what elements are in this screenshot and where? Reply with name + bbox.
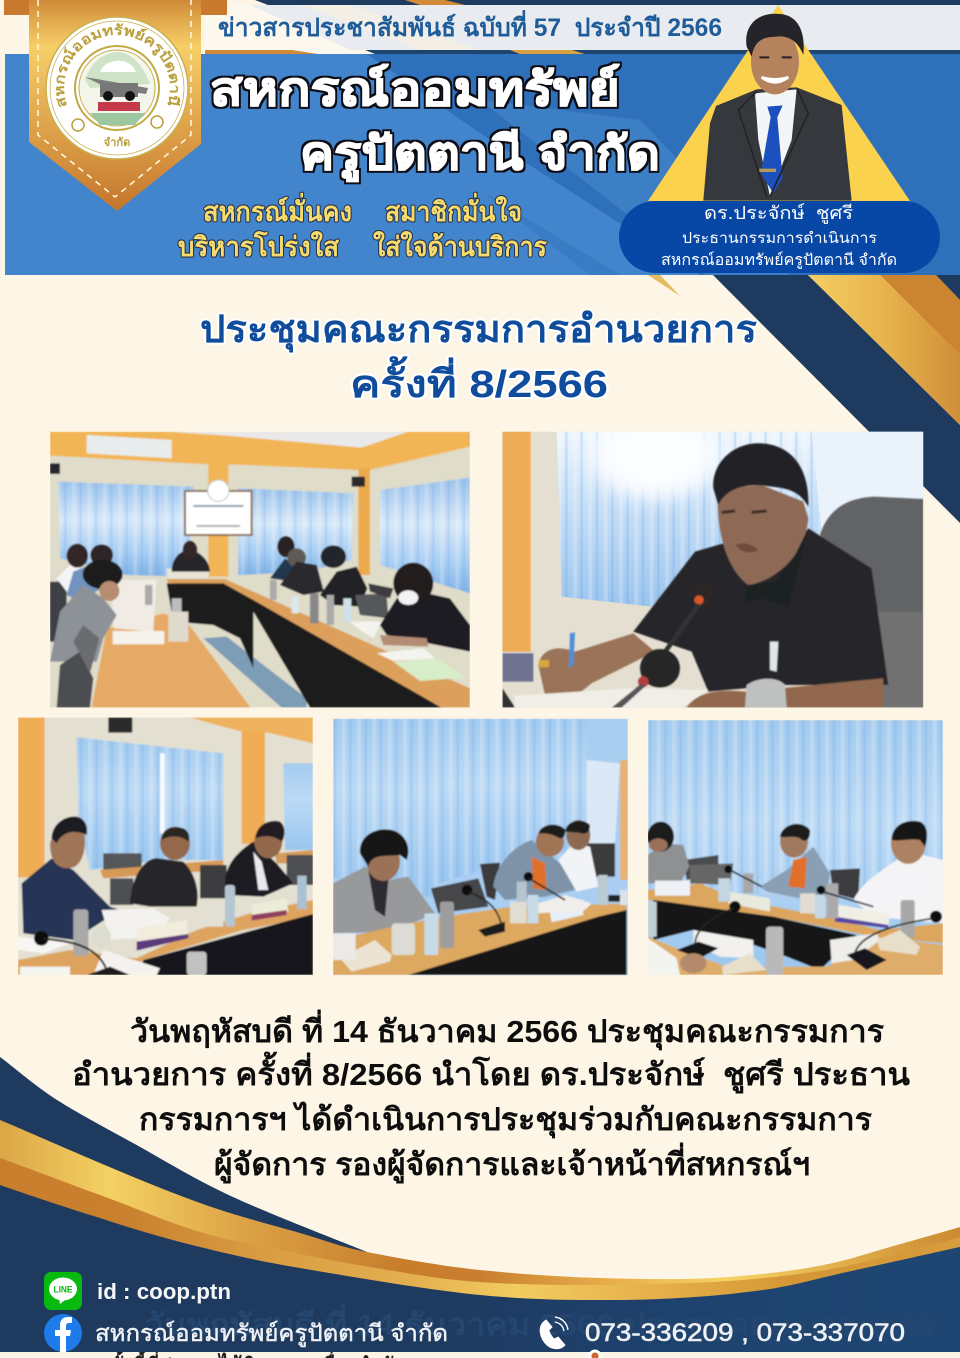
- title: ครั้งที่ 8/2566: [350, 356, 608, 406]
- motto text: ใส่ใจด้านบริการ: [373, 231, 547, 262]
- ribbon with logo: [4, 0, 227, 211]
- LINE id: id : coop.ptn: [97, 1279, 231, 1304]
- icon: LINE: LINE: [54, 1284, 72, 1294]
- newsletter issue line: ข่าวสารประชาสัมพันธ์ ฉบับที่ 57 ประจำปี 2566: [218, 10, 722, 42]
- icon: telephone: [541, 1317, 568, 1348]
- body paragraph: [72, 1009, 910, 1184]
- header band: [5, 0, 960, 296]
- body paragraph: กรรมการฯ ได้ดำเนินการประชุมร่วมกับคณะกรรมการ: [139, 1101, 872, 1139]
- motto text: [178, 192, 547, 262]
- heading: organisation name: [210, 63, 660, 182]
- motto text: บริหารโปร่งใส: [178, 230, 339, 262]
- heading: organisation name: ครูปัตตานี จำกัด: [300, 127, 660, 182]
- name pill: ดร.ประจักษ์ ชูศรี: [704, 203, 853, 224]
- faint ghost line in footer: วันพฤหัสบดี ที่ 14 ธันวาคม 2566 ประชุมคณะกรรมการ: [145, 1303, 935, 1344]
- yellow triangle behind chairman: [648, 5, 910, 201]
- photo: committee members reading: [332, 719, 628, 975]
- body paragraph: วันพฤหัสบดี ที่ 14 ธันวาคม 2566 ประชุมคณะกรรมการ: [130, 1009, 884, 1051]
- heading: organisation name: สหกรณ์ออมทรัพย์: [210, 63, 620, 115]
- name pill: สหกรณ์ออมทรัพย์ครูปัตตานี จำกัด: [661, 251, 897, 270]
- photo: committee members speaking: [647, 720, 943, 975]
- logo: cooperative seal: [45, 16, 189, 160]
- cropped bottom strip: [0, 1350, 960, 1358]
- decorative diagonal stripes, upper right: [713, 275, 960, 523]
- logo: cooperative seal: จำกัด: [104, 136, 130, 149]
- icon: LINE: [44, 1272, 82, 1310]
- body paragraph: อำนวยการ ครั้งที่ 8/2566 นำโดย ดร.ประจักษ์ ชูศรี ประธาน: [72, 1051, 910, 1094]
- photo: chairman at the microphone: [502, 412, 923, 708]
- title: [200, 309, 758, 406]
- title: ประชุมคณะกรรมการอำนวยการ: [200, 309, 758, 353]
- logo: cooperative seal: สหกรณ์ออมทรัพย์ครูปัตตานี: [56, 23, 180, 108]
- phone numbers: 073-336209 , 073-337070: [585, 1319, 905, 1347]
- name pill: [619, 201, 940, 273]
- name pill: ประธานกรรมการดำเนินการ: [682, 230, 877, 247]
- motto text: สมาชิกมั่นใจ: [385, 192, 522, 227]
- photo: three committee members: [18, 717, 313, 975]
- body paragraph: ผู้จัดการ รองผู้จัดการและเจ้าหน้าที่สหกรณ์ฯ: [214, 1142, 810, 1184]
- photo: meeting room overview: [50, 432, 470, 708]
- footer wave: [0, 1057, 960, 1358]
- motto text: สหกรณ์มั่นคง: [203, 192, 352, 227]
- portrait: chairman: [703, 14, 852, 201]
- icon: Facebook: [44, 1314, 82, 1352]
- Facebook page name: สหกรณ์ออมทรัพย์ครูปัตตานี จำกัด: [95, 1320, 448, 1347]
